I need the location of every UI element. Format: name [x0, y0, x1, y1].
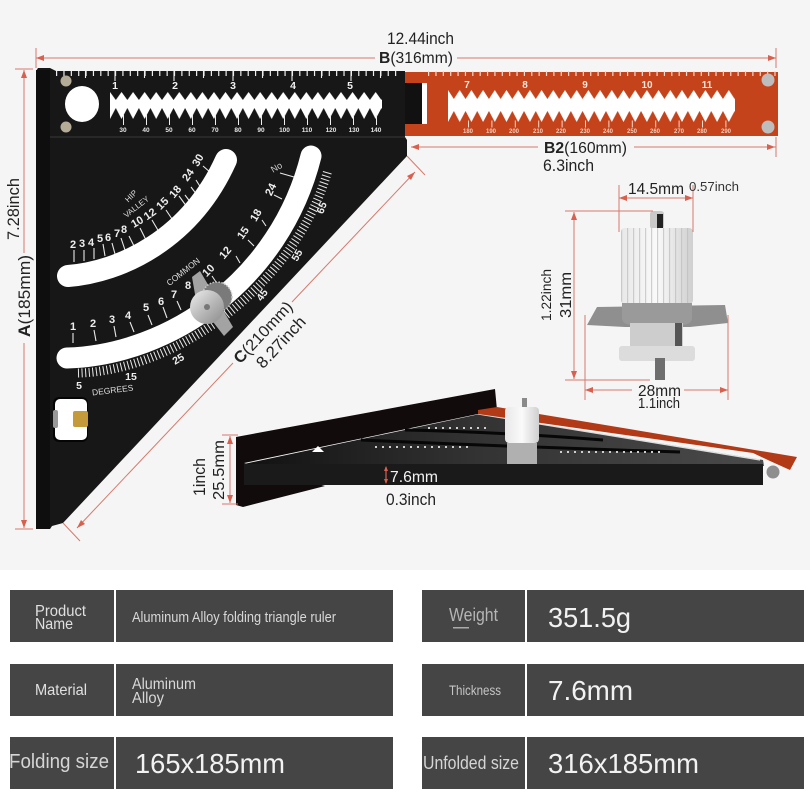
- dimension: folded height: [191, 435, 238, 504]
- common slot: [67, 156, 311, 358]
- top background: [0, 0, 810, 570]
- product name value: Aluminum Alloy folding triangle ruler: [132, 609, 336, 626]
- collar: [622, 303, 692, 325]
- knurled grip: [621, 228, 693, 304]
- top pin: [650, 211, 664, 229]
- scale marks on the face: [375, 428, 660, 452]
- foot plate: [619, 346, 695, 361]
- millimetre numbers: 60: [188, 127, 196, 134]
- diameter in millimetres: 14.5mm: [628, 181, 684, 198]
- side view knob: [505, 398, 539, 464]
- extension in millimetres: B2(160mm): [544, 140, 627, 157]
- unfolded size value: 316x185mm: [548, 748, 699, 779]
- hip valley ticks: [74, 166, 211, 262]
- orange ruler millimetre numbers: 180: [463, 129, 474, 135]
- common scale: 3: [109, 314, 115, 326]
- millimetre numbers: 90: [257, 127, 265, 134]
- millimetre numbers: 140: [371, 127, 382, 134]
- toothed slot: [110, 92, 382, 119]
- common scale: 24: [263, 181, 280, 198]
- degree scale: 55: [289, 247, 306, 264]
- back fence: [236, 389, 497, 507]
- inch numbers: 4: [290, 80, 296, 92]
- orange ruler lower ticks: [468, 120, 728, 128]
- width in inches: 1.1inch: [638, 396, 680, 412]
- degree scale: 65: [315, 200, 330, 216]
- hip valley caption: VALLEY: [122, 194, 151, 220]
- common scale: 2: [90, 318, 96, 330]
- orange ruler millimetre numbers: 240: [603, 129, 614, 135]
- orange ruler millimetre numbers: 260: [650, 129, 661, 135]
- orange ruler millimetre numbers: 250: [627, 129, 638, 135]
- folding size label: Folding size: [9, 751, 109, 773]
- orange ruler inch numbers: [464, 80, 713, 91]
- common scale: 1: [70, 321, 76, 333]
- dimension: hypotenuse C: [63, 156, 425, 541]
- common scale: 6: [158, 296, 164, 308]
- white edge below strip: [478, 414, 760, 460]
- lower ruler ticks: [123, 115, 377, 125]
- millimetre numbers: 70: [211, 127, 219, 134]
- hex body: [630, 323, 683, 347]
- table row: product name and weight: [10, 590, 804, 642]
- hinge pin: [766, 466, 780, 478]
- millimetre numbers: 30: [119, 127, 127, 134]
- knob height in millimetres: 31mm: [558, 272, 575, 318]
- orange ruler millimetre numbers: 190: [486, 129, 497, 135]
- folded height in millimetres: 25.5mm: [211, 440, 228, 500]
- extension in inches: 6.3inch: [543, 156, 594, 175]
- millimetre numbers: 120: [326, 127, 337, 134]
- hanging hole: [65, 86, 99, 122]
- level window: [312, 446, 324, 452]
- weight label: Weight: [449, 605, 498, 625]
- inch numbers: [112, 80, 353, 92]
- thickness value: 7.6mm: [548, 675, 633, 706]
- orange ruler inch numbers: 11: [702, 80, 713, 91]
- dimension: knob width: [585, 315, 728, 412]
- common scale: 8: [185, 280, 191, 292]
- no mark: No: [269, 160, 284, 175]
- millimetre numbers: 50: [165, 127, 173, 134]
- thickness in inches: 0.3inch: [386, 491, 436, 509]
- top ruler divider: [50, 136, 405, 138]
- common ticks: [73, 173, 294, 343]
- panel: folded side view: [236, 389, 797, 507]
- thickness label: Thickness: [449, 683, 501, 698]
- table row: folding and unfolded size: [9, 737, 804, 789]
- hip valley scale: 6: [105, 232, 111, 244]
- common scale: [70, 181, 280, 333]
- hinge: [405, 72, 427, 136]
- left rail: [36, 70, 50, 529]
- top ruler long ticks: [86, 71, 380, 81]
- diameter in inches: 0.57inch: [689, 179, 739, 194]
- top ruler ticks: [56, 71, 402, 76]
- degree ticks: [78, 170, 328, 373]
- millimetre numbers: 80: [234, 127, 242, 134]
- material value: Aluminum: [132, 676, 196, 693]
- knob height in inches: 1.22inch: [538, 269, 554, 321]
- orange ruler inch numbers: 8: [522, 80, 528, 91]
- hip valley scale: 3: [79, 238, 85, 250]
- length in millimetres: B(316mm): [379, 50, 453, 67]
- common scale: 7: [171, 289, 177, 301]
- dimension: height A: [4, 69, 34, 529]
- hip valley scale: [70, 152, 207, 251]
- angle locking knob: [190, 271, 233, 336]
- panel: orange ruler extension: [418, 72, 778, 136]
- panel: knob detail: [587, 211, 728, 380]
- hip valley scale: 2: [70, 239, 76, 251]
- millimetre numbers: 100: [279, 127, 290, 134]
- millimetre numbers: 110: [302, 127, 313, 134]
- millimetre numbers: 130: [349, 127, 360, 134]
- wings: [587, 305, 728, 327]
- orange ruler millimetre numbers: 270: [674, 129, 685, 135]
- hip valley scale: 18: [167, 184, 184, 201]
- hip valley scale: 7: [114, 228, 120, 240]
- top face: [244, 414, 764, 466]
- bubble level window: [53, 397, 88, 442]
- orange ruler millimetre numbers: 230: [580, 129, 591, 135]
- orange ruler inch numbers: 7: [464, 80, 470, 91]
- hip valley scale: 30: [190, 152, 207, 169]
- material value: Alloy: [132, 690, 164, 707]
- dimension: overall length B: [36, 29, 776, 68]
- orange ruler top ticks: [428, 71, 776, 76]
- degree scale: 5: [76, 380, 82, 392]
- common scale: 4: [125, 310, 132, 322]
- orange ruler millimetre numbers: 210: [533, 129, 544, 135]
- slots on the face: [361, 430, 680, 452]
- degree scale: [76, 200, 330, 392]
- weight underline: [453, 627, 469, 628]
- dimension: knob diameter: [619, 179, 739, 232]
- front edge bar: [244, 464, 763, 485]
- screws: [60, 76, 72, 132]
- hip valley scale: 5: [97, 233, 103, 245]
- thickness in millimetres: 7.6mm: [390, 469, 438, 486]
- hip valley slot: [68, 160, 226, 276]
- product name label: Name: [35, 616, 73, 633]
- common scale: 12: [217, 245, 234, 262]
- degree scale: 25: [170, 351, 187, 368]
- common scale: 15: [235, 225, 252, 242]
- folding size value: 165x185mm: [135, 748, 285, 779]
- orange ruler millimetre numbers: [463, 129, 732, 135]
- common scale: 18: [248, 207, 265, 224]
- common scale: 10: [200, 262, 217, 279]
- hip valley scale: 15: [154, 195, 171, 212]
- common caption: COMMON: [164, 255, 202, 288]
- orange strip: [478, 407, 797, 470]
- orange ruler inch numbers: 9: [582, 80, 588, 91]
- height in inches: 7.28inch: [4, 178, 23, 240]
- orange ruler millimetre numbers: 280: [697, 129, 708, 135]
- inch numbers: 2: [172, 80, 178, 92]
- material label: Material: [35, 682, 87, 699]
- dimension: thickness: [384, 466, 438, 509]
- hip valley scale: 12: [142, 206, 159, 223]
- inch numbers: 3: [230, 80, 236, 92]
- hypotenuse in inches: 8.27inch: [253, 313, 310, 372]
- dimension: extension B2: [411, 137, 776, 175]
- table row: material and thickness: [10, 664, 804, 716]
- hip valley scale: 8: [121, 224, 127, 236]
- height in millimetres: A(185mm): [16, 255, 34, 337]
- degrees caption: DEGREES: [91, 382, 134, 398]
- orange ruler slot: [448, 90, 735, 122]
- lower pin: [655, 358, 665, 380]
- millimetre numbers: [119, 127, 382, 134]
- panel: black triangle ruler: [36, 68, 407, 529]
- hip valley scale: 4: [88, 237, 95, 249]
- hip valley scale: 24: [180, 166, 197, 184]
- orange ruler millimetre numbers: 290: [721, 129, 732, 135]
- dimension: knob height: [538, 211, 653, 380]
- unfolded size label: Unfolded size: [423, 753, 519, 773]
- inch numbers: 5: [347, 80, 353, 92]
- degree scale: 15: [125, 371, 137, 383]
- width in millimetres: 28mm: [638, 383, 681, 400]
- orange ruler millimetre numbers: 220: [556, 129, 567, 135]
- degree scale: 45: [254, 287, 271, 304]
- folded height in inches: 1inch: [191, 458, 209, 496]
- inch numbers: 1: [112, 80, 118, 92]
- hypotenuse in millimetres: C(210mm): [231, 299, 297, 367]
- rivets: [762, 74, 774, 134]
- length in inches: 12.44inch: [387, 29, 454, 48]
- hip valley scale: 10: [129, 214, 146, 231]
- orange ruler inch numbers: 10: [641, 80, 653, 91]
- common scale: 5: [143, 302, 149, 314]
- millimetre numbers: 40: [142, 127, 150, 134]
- orange ruler millimetre numbers: 200: [509, 129, 520, 135]
- hip valley caption: HIP: [123, 188, 139, 204]
- weight value: 351.5g: [548, 602, 631, 633]
- product name label: Product: [35, 603, 87, 620]
